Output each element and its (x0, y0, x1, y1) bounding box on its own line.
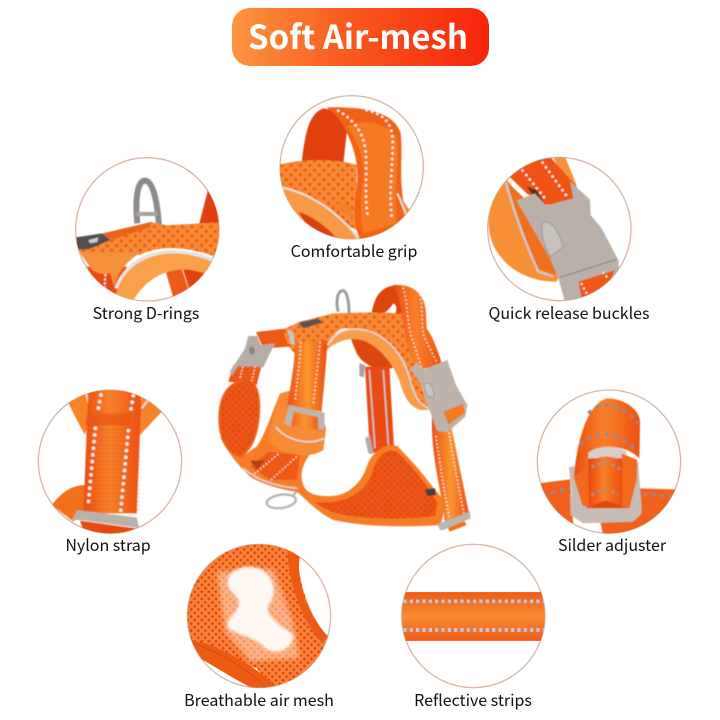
label: slider adjuster: Silder adjuster (558, 532, 667, 556)
title text: Soft Air-mesh (248, 11, 468, 59)
handle (393, 285, 443, 370)
central harness (219, 285, 471, 532)
slider buckle (284, 405, 325, 430)
panel: slider adjuster (537, 390, 681, 556)
photo circle: slider adjuster (537, 390, 681, 537)
label: quick release buckles: Quick release buckles (488, 300, 650, 324)
left strap below buckle (228, 365, 262, 385)
panel: breathable air mesh (180, 542, 334, 711)
left buckle (230, 336, 275, 383)
label: comfortable grip: Comfortable grip (291, 238, 417, 262)
belly pad mesh (315, 450, 437, 518)
back mesh (283, 312, 432, 410)
label: reflective strips: Reflective strips (414, 687, 532, 711)
photo circle: reflective strip (400, 544, 547, 688)
label: breathable air mesh: Breathable air mesh (184, 687, 334, 711)
right buckle (410, 360, 467, 432)
left upper strap (256, 329, 290, 348)
inner chest strap (243, 452, 300, 488)
panel: strong D-rings (75, 158, 223, 324)
bottom O-ring (266, 490, 298, 510)
far-side strap (359, 363, 394, 454)
mesh trim (287, 318, 431, 410)
photo circle: air mesh (180, 542, 331, 692)
far-side shoulder pad (350, 336, 405, 369)
label: nylon strap: Nylon strap (65, 532, 151, 556)
photo circle: buckle (488, 157, 631, 302)
photo circle: nylon strap (38, 390, 182, 540)
front strap (286, 341, 327, 431)
panel: quick release buckles (488, 157, 650, 324)
label: strong D-rings: Strong D-rings (93, 300, 199, 324)
photo circle: grip handle (278, 96, 423, 240)
photo circle: D-ring (75, 158, 223, 303)
panel: nylon strap (38, 390, 182, 556)
panel: reflective strips (400, 544, 547, 711)
handle loop inner (372, 285, 408, 315)
title banner (232, 8, 489, 66)
long right strap (432, 417, 471, 532)
body panel with belly pad outline (220, 392, 446, 526)
D-ring top (337, 291, 349, 316)
front loop padding (268, 391, 326, 455)
panel: comfortable grip (278, 96, 423, 262)
left chest pad (219, 381, 259, 457)
